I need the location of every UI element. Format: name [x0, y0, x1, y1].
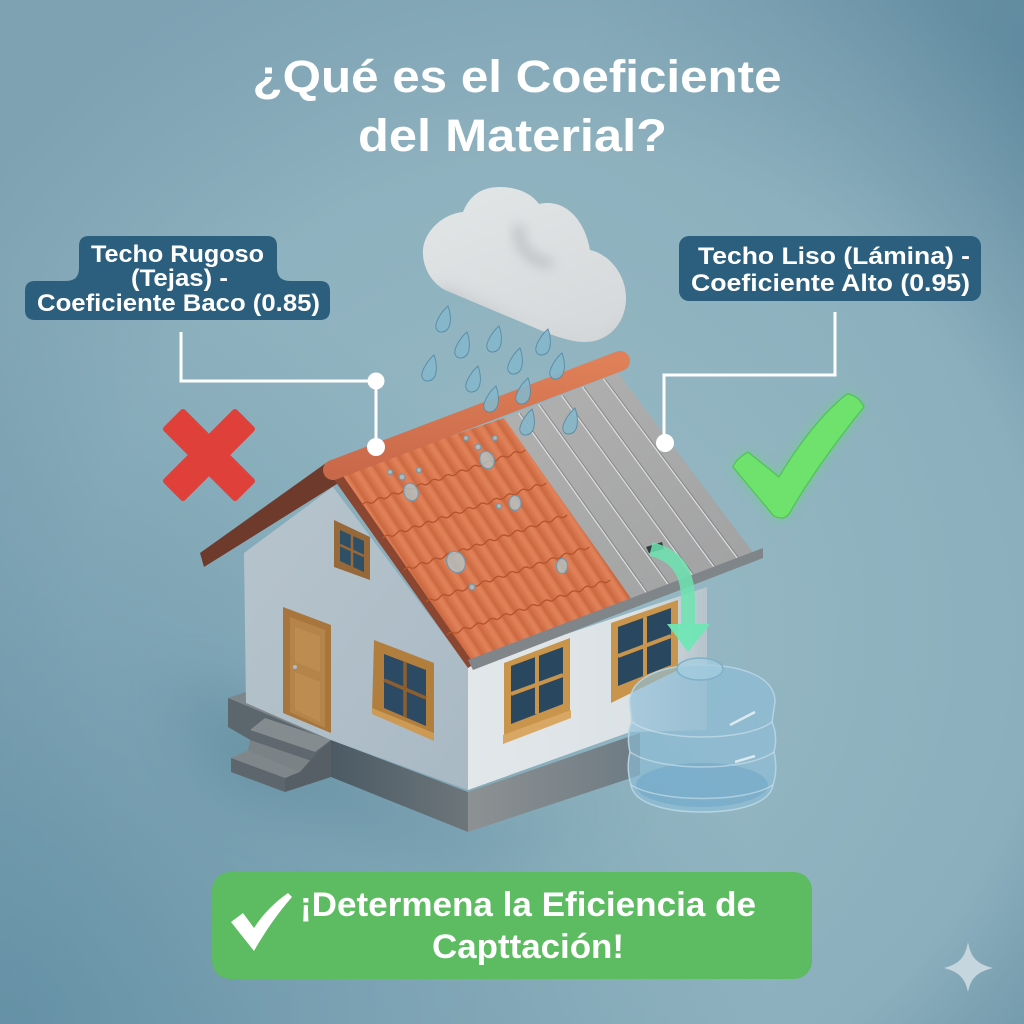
house: [200, 361, 763, 832]
banner: conclusion: Capttación!: [432, 928, 624, 966]
window: gable: [334, 520, 370, 580]
arrow: water flow into tank: [651, 549, 710, 652]
water tank: [628, 658, 776, 812]
leader line: smooth roof: [656, 312, 835, 452]
window: left wall: [372, 640, 434, 741]
icon: raindrops: [422, 306, 577, 435]
callout: smooth roof label: [679, 236, 981, 301]
callout: rough roof label: Techo Rugoso: [91, 241, 264, 268]
window: front wall 1: [503, 638, 571, 744]
leader line: rough roof: [181, 332, 385, 456]
walls: [244, 487, 707, 790]
icon: sparkle watermark: [944, 942, 993, 992]
door: [283, 607, 331, 733]
callout: rough roof label: [25, 236, 330, 320]
icon: cloud: [422, 187, 626, 342]
gable eave: [200, 463, 340, 567]
callout: smooth roof label: Techo Liso (Lámina) -: [698, 243, 970, 270]
banner: conclusion: [212, 872, 812, 979]
title: [252, 51, 782, 161]
window: front wall 2: [611, 600, 678, 703]
icon: white check: [231, 893, 292, 951]
gutter: [468, 548, 763, 670]
callout: smooth roof label: Coeficiente Alto (0.95): [691, 270, 970, 297]
icon: green check: [733, 394, 864, 518]
callout: rough roof label: Coeficiente Baco (0.85): [37, 290, 320, 317]
panel: rough tile roof: [333, 418, 631, 668]
water beads on tiles: [388, 436, 568, 590]
title: ¿Qué es el Coeficiente: [252, 51, 782, 102]
panel: smooth metal roof: [504, 373, 755, 598]
title: del Material?: [358, 110, 667, 161]
ridge cap: [333, 361, 620, 470]
banner: conclusion: ¡Determena la Eficiencia de: [300, 886, 756, 924]
icon: red cross: [166, 412, 252, 498]
callout: rough roof label: (Tejas) -: [131, 265, 228, 292]
foundation and steps: [228, 692, 640, 832]
